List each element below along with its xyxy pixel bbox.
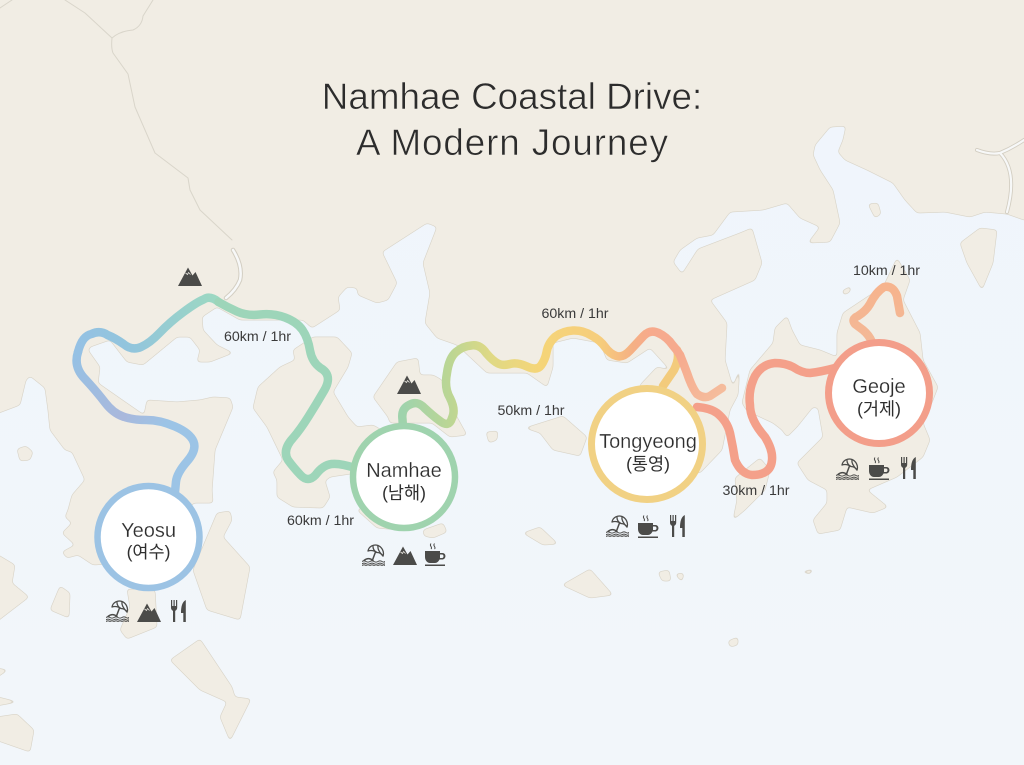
- distance label: Tongyeong to Geoje: 30km / 1hr: [722, 483, 790, 499]
- route: branch stub near Tongyeong: [680, 355, 722, 397]
- Geoje island: [742, 258, 938, 534]
- rivers and faint boundaries: [0, 0, 1024, 298]
- title: Namhae Coastal Drive:: [322, 76, 702, 117]
- distance label: Namhae to Tongyeong upper: 60km / 1hr: [541, 306, 609, 322]
- icons: Geoje amenities: [836, 457, 916, 480]
- stop: Yeosu: [98, 486, 200, 588]
- mainland coast: [0, 0, 1024, 565]
- route lines: [77, 287, 900, 492]
- route: Geoje north loop: [854, 287, 900, 342]
- stop: Yeosu: (여수): [127, 542, 170, 562]
- stop: Namhae: (남해): [382, 483, 426, 503]
- distance label: Yeosu to Namhae upper: 60km / 1hr: [224, 329, 291, 345]
- icon: mountain on mainland: [178, 268, 202, 286]
- stop: Namhae: Namhae: [366, 460, 442, 482]
- title: [322, 76, 702, 163]
- Yeosu east island: [193, 511, 250, 620]
- small islet: [17, 446, 33, 461]
- distance label: Yeosu to Namhae lower: 60km / 1hr: [287, 513, 354, 529]
- stop: Yeosu: Yeosu: [121, 520, 176, 542]
- islands below Namhae: [357, 500, 400, 530]
- icons: Tongyeong amenities: [606, 515, 685, 538]
- island at 30km label: [733, 458, 770, 520]
- distance label: Geoje north: 10km / 1hr: [853, 263, 920, 279]
- south island near Yeosu: [170, 639, 251, 741]
- big island west of Namhae: [253, 337, 385, 508]
- left edge islands: [0, 550, 29, 627]
- stop: Geoje: Geoje: [852, 376, 906, 398]
- route: Tongyeong to Geoje: [697, 363, 835, 475]
- distance label: Namhae to Tongyeong lower: 50km / 1hr: [497, 403, 565, 419]
- stop: Namhae: [353, 426, 455, 528]
- icons: Yeosu amenities: [106, 600, 186, 622]
- stop: Tongyeong: (통영): [626, 454, 670, 474]
- icons: Namhae amenities: [362, 544, 445, 566]
- middle islands: [486, 431, 498, 443]
- island under Yeosu icons: [120, 589, 157, 639]
- icon: mountain on Namhae island: [397, 376, 421, 394]
- stop: Tongyeong: [592, 388, 702, 500]
- northeast islets: [842, 286, 851, 295]
- route: Namhae to Tongyeong: [402, 330, 680, 428]
- Namhae mountain island: [373, 358, 467, 437]
- route: Yeosu to Namhae: [77, 298, 355, 492]
- island west of Yeosu icons: [50, 586, 70, 618]
- stop: Geoje: (거제): [857, 399, 901, 419]
- stop: Tongyeong: Tongyeong: [599, 431, 697, 453]
- title: A Modern Journey: [356, 122, 669, 163]
- stop: Geoje: [828, 342, 930, 444]
